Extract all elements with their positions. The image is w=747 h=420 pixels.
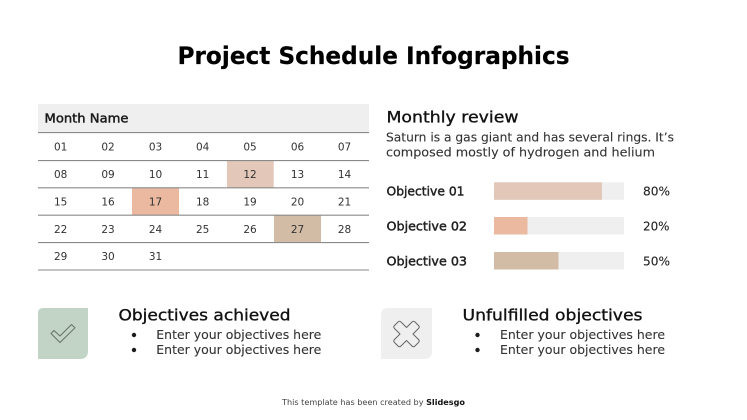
calendar days: 18 [196, 196, 209, 208]
footer credit: This template has been created by Slidesgo [281, 398, 466, 407]
highlighted day 27 [274, 216, 321, 242]
calendar days: 03 [149, 142, 162, 154]
calendar days: 08 [54, 169, 67, 181]
unfulfilled objectives list: Enter your objectives here [500, 328, 665, 342]
monthly review text: composed mostly of hydrogen and helium [386, 146, 655, 160]
calendar days: 23 [101, 224, 115, 236]
objective 02 row [386, 217, 670, 234]
calendar days: 17 [149, 196, 162, 208]
calendar days: 06 [291, 142, 304, 154]
objectives achieved heading: Objectives achieved [118, 306, 290, 324]
calendar days: 25 [196, 224, 209, 236]
monthly review text: Saturn is a gas giant and has several rings. It’s [386, 130, 674, 144]
objectives achieved list [132, 328, 321, 357]
calendar days: 10 [149, 169, 162, 181]
objectives achieved list: Enter your objectives here [156, 343, 321, 357]
calendar days: 28 [338, 224, 351, 236]
calendar days: 27 [291, 224, 304, 236]
unfulfilled objectives list [475, 328, 665, 357]
objective 02 row: 20% [643, 220, 670, 234]
highlighted day 12 [227, 161, 274, 188]
objective 03 row: 50% [643, 254, 670, 268]
calendar days: 13 [291, 169, 304, 181]
objective 01 row [386, 182, 670, 200]
calendar days: 24 [149, 224, 162, 236]
objective 03 row [386, 252, 670, 270]
monthly review text [386, 130, 674, 160]
calendar days: 29 [54, 251, 67, 263]
calendar days: 02 [101, 142, 115, 154]
calendar days: 09 [101, 169, 115, 181]
calendar days: 14 [338, 169, 351, 181]
calendar days: 19 [243, 196, 257, 208]
calendar days: 04 [196, 142, 210, 154]
objective 01 row: Objective 01 [386, 184, 464, 198]
objective 03 row: Objective 03 [386, 254, 467, 268]
calendar days: 30 [101, 251, 115, 263]
calendar days: 15 [54, 196, 67, 208]
calendar days: 20 [291, 196, 304, 208]
objectives achieved list: Enter your objectives here [156, 328, 321, 342]
unfulfilled objectives list: Enter your objectives here [500, 343, 665, 357]
highlighted day 17 [132, 188, 179, 215]
calendar days: 05 [243, 142, 257, 154]
calendar days: 01 [54, 142, 67, 154]
calendar days: 22 [54, 224, 67, 236]
icon: cross in grey tile [381, 308, 432, 359]
calendar days: 11 [196, 169, 209, 181]
calendar days: 31 [149, 251, 162, 263]
calendar month header: Month Name [44, 110, 129, 126]
objective 02 row: Objective 02 [386, 218, 467, 234]
calendar days: 12 [243, 169, 257, 181]
calendar days: 16 [101, 196, 115, 208]
monthly review heading: Monthly review [386, 108, 518, 126]
unfulfilled objectives heading: Unfulfilled objectives [462, 306, 642, 324]
title: Project Schedule Infographics [178, 42, 570, 70]
icon: check in green tile [38, 308, 88, 359]
calendar days: 21 [338, 196, 351, 208]
objective 01 row: 80% [643, 184, 670, 198]
calendar panel [38, 104, 369, 270]
calendar month header [38, 104, 369, 132]
calendar days: 26 [243, 224, 257, 236]
calendar days: 07 [338, 142, 351, 154]
calendar days [54, 142, 351, 263]
